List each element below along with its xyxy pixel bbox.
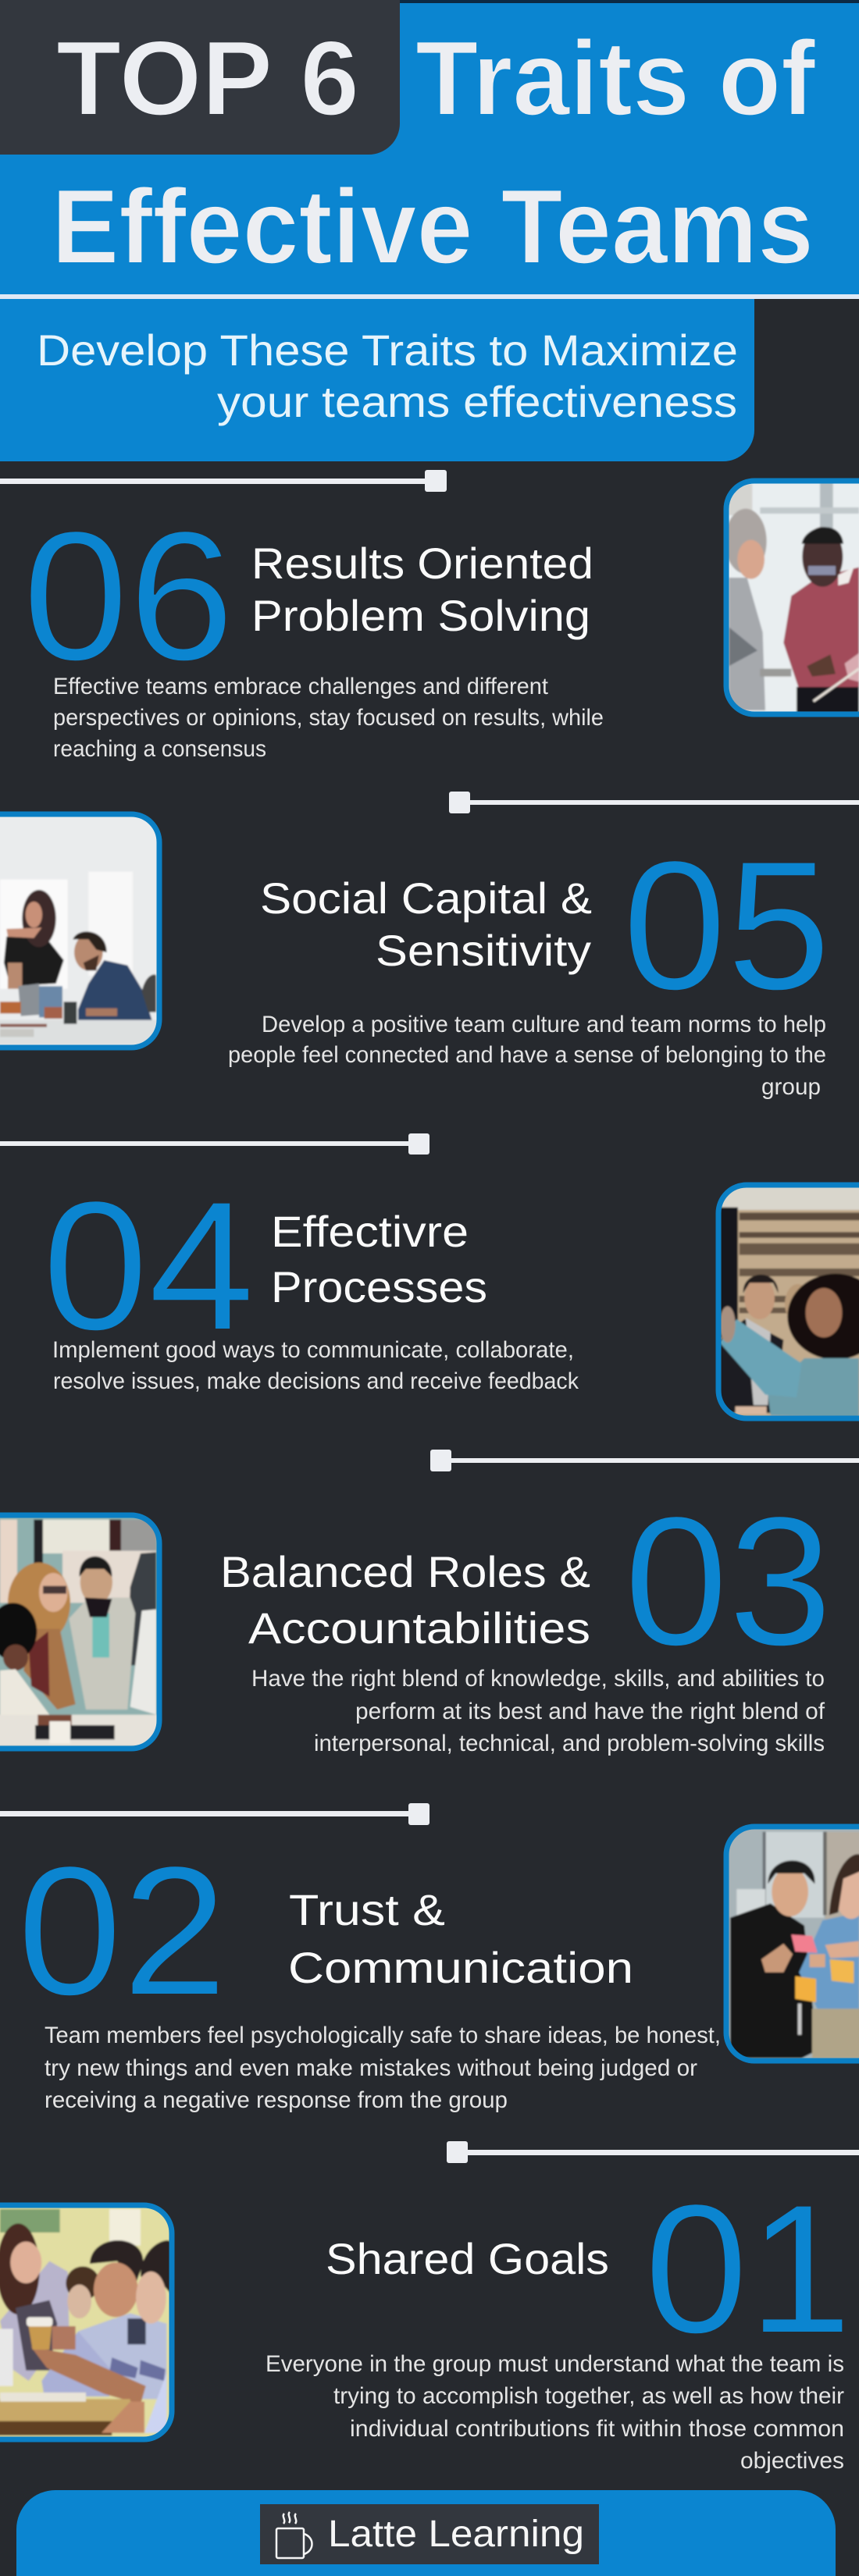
footer bar: [16, 2490, 836, 2576]
title line: Effective Teams: Effective Teams: [52, 167, 814, 286]
section 01: [266, 2166, 852, 2474]
body text 06: perspectives or opinions, stay focused on results, while: [53, 705, 604, 731]
body text 01: [266, 2351, 844, 2474]
body text 05: Develop a positive team culture and team norms to help: [262, 1012, 826, 1037]
body text 06: [53, 674, 604, 762]
body text 05: group: [761, 1074, 821, 1100]
body text 02: [45, 2023, 721, 2113]
number 02: 02: [17, 1828, 227, 2034]
slider divider 2: [449, 792, 859, 813]
subtitle panel: your teams effectiveness: [217, 377, 737, 426]
icon: coffee mug: [276, 2512, 312, 2558]
photo: colleagues at white office table: [0, 806, 166, 1054]
number 04: 04: [42, 1163, 255, 1369]
heading: Balanced Roles and Accountabilities: [220, 1547, 590, 1653]
body text 03: interpersonal, technical, and problem-solving skills: [314, 1731, 825, 1756]
heading: Trust and Communication: [288, 1885, 633, 1992]
heading: Social Capital and Sensitivity: Social Capital &: [260, 873, 592, 923]
body text 01: individual contributions fit within those common: [350, 2416, 844, 2442]
heading: Trust and Communication: Communication: [288, 1943, 633, 1992]
body text 04: [52, 1337, 579, 1394]
section 05: [228, 823, 831, 1100]
heading: Results Oriented Problem Solving: Problem Solving: [251, 591, 590, 640]
heading: Effectivre Processes: Processes: [271, 1262, 487, 1311]
number 03: 03: [624, 1478, 832, 1685]
heading: Effectivre Processes: [271, 1207, 487, 1311]
title line: TOP 6: TOP 6: [56, 19, 359, 137]
photo: colleagues with sticky notes: [713, 1824, 859, 2071]
slider divider 1: [0, 470, 447, 492]
slider divider 5: [0, 1803, 430, 1825]
logo: Latte Learning: Latte Learning: [328, 2514, 584, 2555]
number 01: 01: [644, 2166, 852, 2372]
photo: team around monitor: [0, 1509, 166, 1751]
body text 03: perform at its best and have the right blend of: [355, 1699, 825, 1724]
body text 06: reaching a consensus: [53, 736, 266, 762]
subtitle panel: [0, 299, 754, 461]
title rule: [0, 294, 859, 299]
body text 01: trying to accomplish together, as well as how their: [333, 2383, 844, 2409]
body text 01: objectives: [740, 2448, 844, 2474]
photo: two colleagues with tablet: [723, 478, 859, 717]
heading: Social Capital and Sensitivity: Sensitivity: [376, 926, 591, 975]
title line: Traits of: Traits of: [415, 19, 816, 137]
heading: Balanced Roles and Accountabilities: Balanced Roles &: [220, 1547, 590, 1596]
section 02: [17, 1828, 721, 2113]
body text 02: try new things and even make mistakes without being judged or: [45, 2055, 697, 2081]
number 06: 06: [23, 493, 234, 699]
slider divider 3: [0, 1133, 430, 1155]
heading: Social Capital and Sensitivity: [260, 873, 592, 975]
body text 02: Team members feel psychologically safe to share ideas, be honest,: [45, 2023, 721, 2048]
header banner: [0, 0, 859, 294]
body text 01: Everyone in the group must understand what the team is: [266, 2351, 844, 2377]
logo: Latte Learning: [260, 2504, 599, 2564]
body text 02: receiving a negative response from the group: [45, 2087, 508, 2113]
subtitle panel: Develop These Traits to Maximize: [37, 326, 738, 375]
body text 06: Effective teams embrace challenges and different: [53, 674, 549, 699]
section 06: [23, 493, 604, 762]
body text 05: people feel connected and have a sense of belonging to the: [228, 1042, 826, 1068]
heading: Shared Goals: Shared Goals: [326, 2234, 609, 2283]
heading: Results Oriented Problem Solving: [251, 539, 593, 640]
heading: Balanced Roles and Accountabilities: Accountabilities: [248, 1603, 590, 1653]
photo: group with coffee at cafe table: [0, 2201, 177, 2441]
body text 03: Have the right blend of knowledge, skills, and abilities to: [251, 1666, 825, 1692]
body text 03: [251, 1666, 825, 1756]
body text 04: Implement good ways to communicate, collaborate,: [52, 1337, 574, 1363]
body text 04: resolve issues, make decisions and receive feedback: [53, 1368, 579, 1394]
section 03: [220, 1478, 832, 1756]
number 05: 05: [622, 823, 831, 1029]
slider divider 4: [430, 1450, 859, 1471]
photo: woman pointing at board: [713, 1184, 859, 1418]
section 04: [42, 1163, 579, 1394]
slider divider 6: [447, 2141, 859, 2163]
body text 05: [228, 1012, 826, 1100]
heading: Effectivre Processes: Effectivre: [271, 1207, 469, 1256]
heading: Trust and Communication: Trust &: [289, 1885, 445, 1934]
heading: Results Oriented Problem Solving: Results Oriented: [251, 539, 593, 588]
